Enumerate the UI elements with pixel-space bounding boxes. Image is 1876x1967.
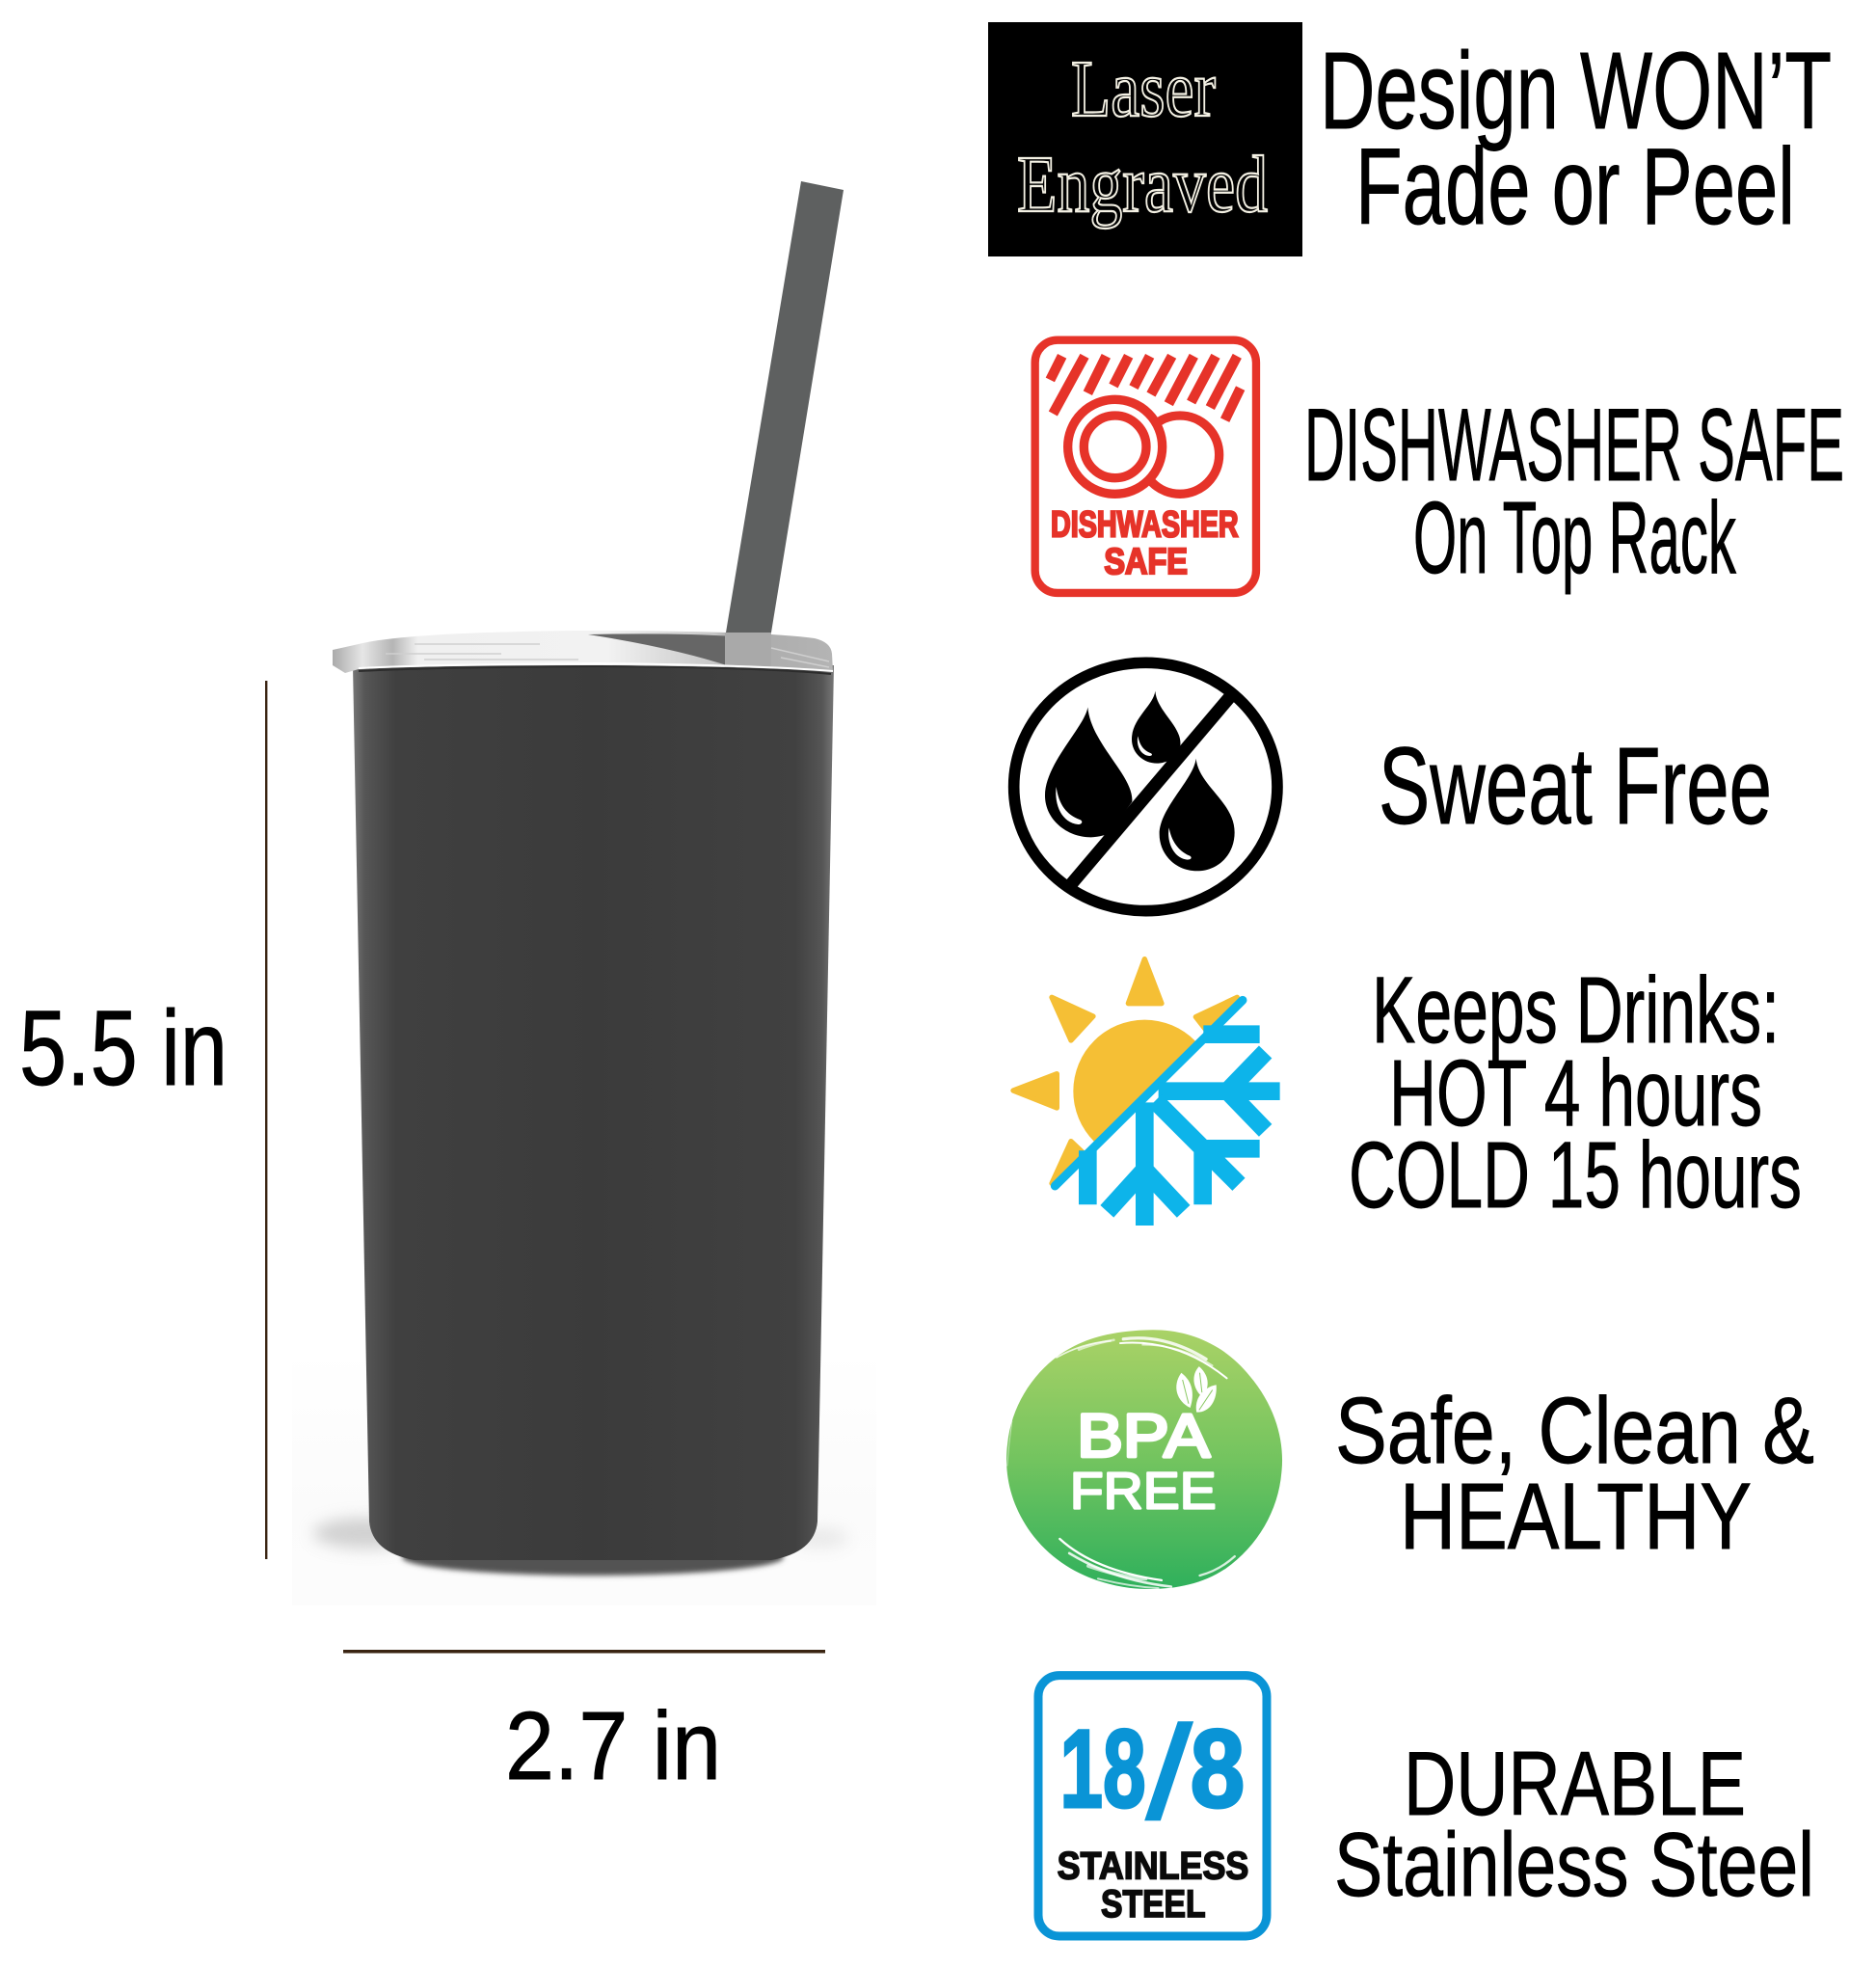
text: keeps drinks hot and cold xyxy=(1349,957,1802,1227)
icon: 18/8 stainless steel: STAINLESS xyxy=(1058,1846,1248,1888)
icon: BPA free: FREE xyxy=(1070,1462,1217,1520)
text: dishwasher safe on top rack xyxy=(1304,387,1844,595)
width label: 2.7 in xyxy=(505,1692,721,1800)
icon: sweat free xyxy=(1014,662,1277,911)
tumbler body xyxy=(353,665,834,1560)
icon: BPA free: BPA xyxy=(1077,1403,1211,1470)
icon: laser engraved badge: Engraved xyxy=(1017,140,1268,229)
tumbler bottom shading xyxy=(402,1539,784,1576)
icon: 18/8 stainless steel: / xyxy=(1146,1699,1192,1846)
brush streaks xyxy=(1007,1338,1235,1588)
text: safe clean healthy xyxy=(1335,1378,1814,1569)
height label: 5.5 in xyxy=(19,989,228,1108)
width dimension line xyxy=(343,1650,825,1653)
icon: 18/8 stainless steel: STEEL xyxy=(1101,1883,1206,1926)
straw xyxy=(726,181,844,633)
leaves xyxy=(1176,1366,1217,1413)
height dimension line xyxy=(265,681,267,1559)
photo: black tumbler with straw xyxy=(292,181,876,1605)
icon: 18/8 stainless steel: 8 xyxy=(1191,1708,1245,1831)
text: durable stainless steel xyxy=(1334,1733,1814,1915)
icon: 18/8 stainless steel xyxy=(1038,1676,1267,1936)
icon: laser engraved badge: Laser xyxy=(1071,44,1216,134)
icon: BPA free xyxy=(1006,1330,1282,1589)
lid xyxy=(333,631,833,674)
icon: dishwasher safe xyxy=(1035,340,1256,593)
icon: 18/8 stainless steel: 18 xyxy=(1059,1708,1146,1831)
text: durable stainless steel: DURABLE xyxy=(1404,1733,1746,1834)
text: design won't fade xyxy=(1320,30,1832,247)
icon: laser engraved badge xyxy=(988,22,1302,256)
text: safe clean healthy: HEALTHY xyxy=(1400,1464,1752,1569)
icon: dishwasher safe: DISHWASHER xyxy=(1051,505,1239,546)
icon: hot and cold xyxy=(1013,959,1280,1226)
icon: dishwasher safe: SAFE xyxy=(1104,542,1188,582)
